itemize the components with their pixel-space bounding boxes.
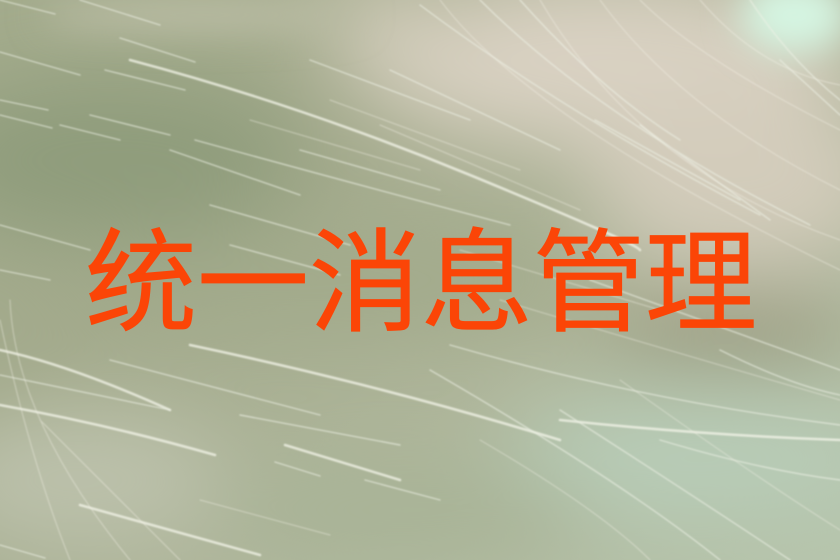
title: 统一消息管理 xyxy=(85,221,757,346)
